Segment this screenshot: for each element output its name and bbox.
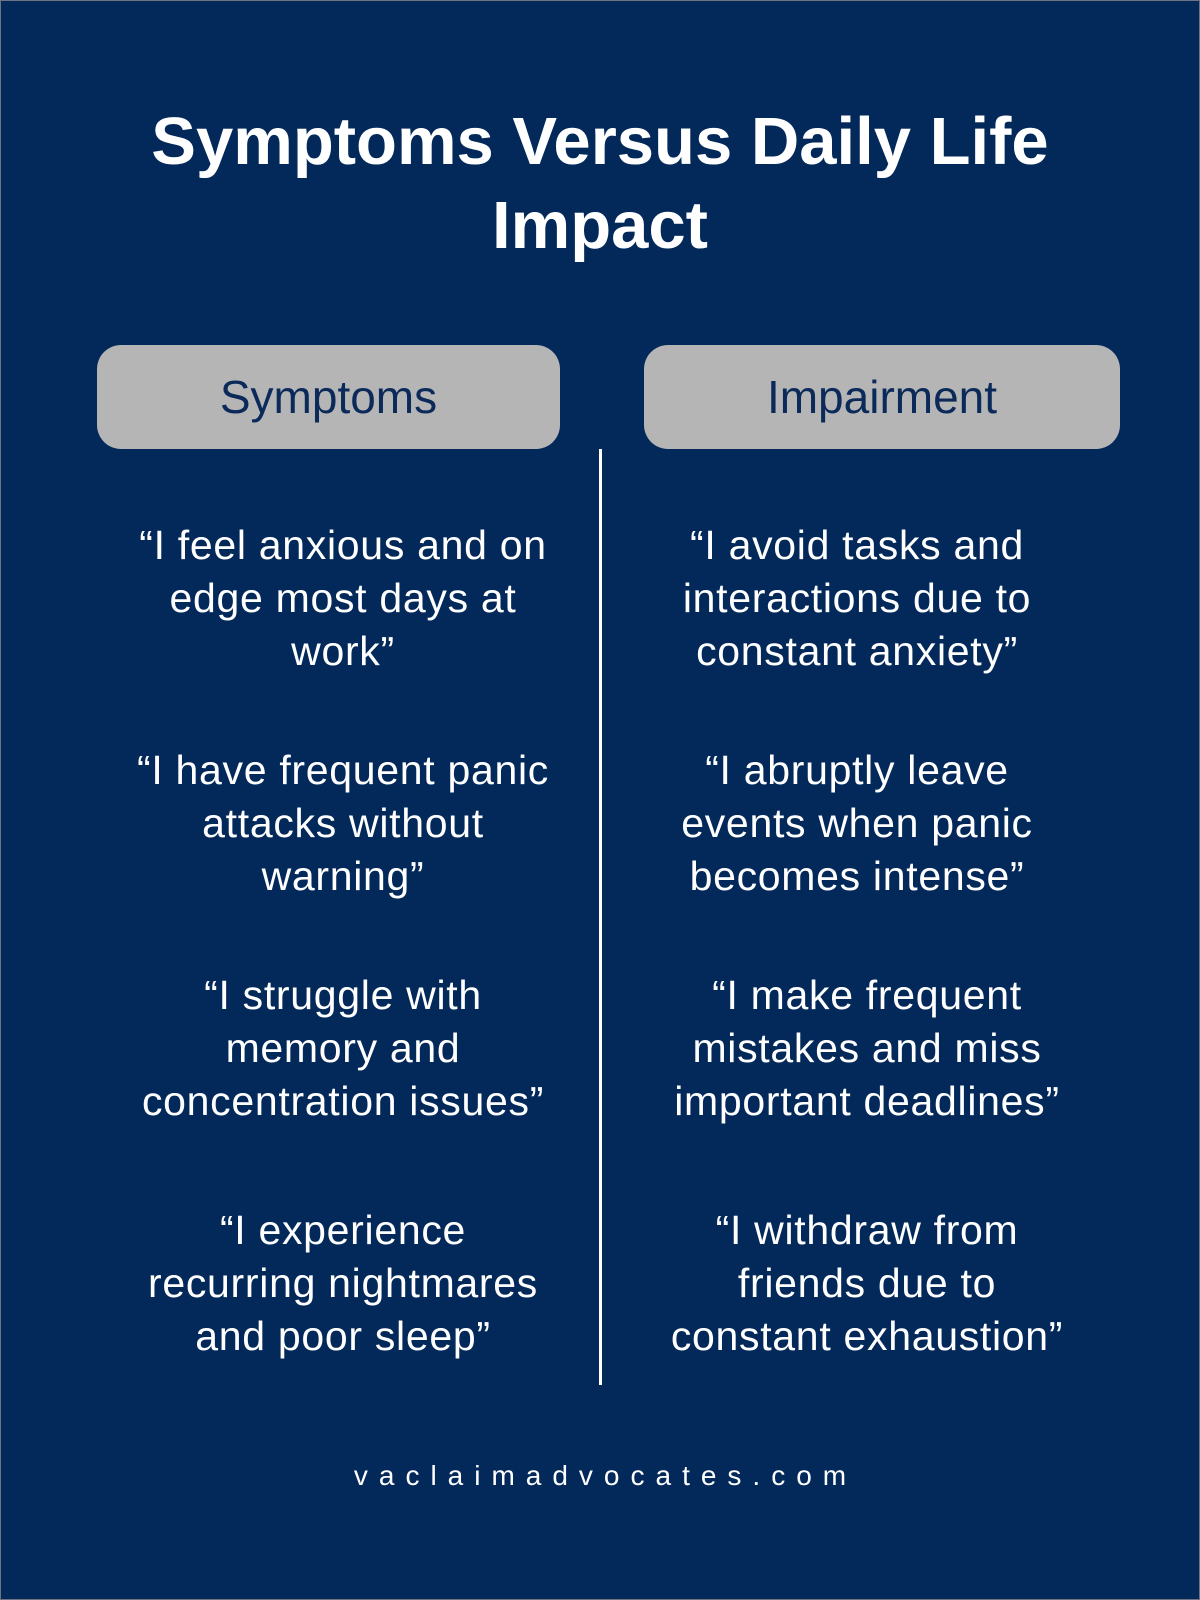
header: impairment xyxy=(644,345,1120,449)
impairment 1 xyxy=(683,522,1031,674)
impairment 3: important deadlines” xyxy=(674,1078,1060,1124)
symptom 4: “I experience xyxy=(220,1207,466,1253)
symptom 1: edge most days at xyxy=(170,575,516,621)
symptom 4: and poor sleep” xyxy=(195,1313,491,1359)
symptom 1 xyxy=(139,522,547,674)
impairment 1: constant anxiety” xyxy=(696,628,1018,674)
impairment 3: “I make frequent xyxy=(712,972,1022,1018)
impairment 1: interactions due to xyxy=(683,575,1031,621)
impairment 4: constant exhaustion” xyxy=(671,1313,1063,1359)
header: symptoms: Symptoms xyxy=(220,371,437,423)
title: Impact xyxy=(492,188,708,263)
center divider line xyxy=(599,449,602,1385)
impairment 4: friends due to xyxy=(738,1260,996,1306)
header: impairment: Impairment xyxy=(767,371,997,423)
symptom 2 xyxy=(137,747,549,899)
symptom 3: “I struggle with xyxy=(204,972,482,1018)
header: symptoms xyxy=(97,345,560,449)
symptom 3 xyxy=(142,972,544,1124)
impairment 2: becomes intense” xyxy=(690,853,1024,899)
symptom 4 xyxy=(148,1207,538,1359)
footer website: vaclaimadvocates.com xyxy=(354,1460,857,1491)
symptom 4: recurring nightmares xyxy=(148,1260,538,1306)
impairment 3 xyxy=(674,972,1060,1124)
impairment 2: events when panic xyxy=(681,800,1033,846)
symptom 1: work” xyxy=(291,628,395,674)
impairment 3: mistakes and miss xyxy=(692,1025,1042,1071)
symptom 1: “I feel anxious and on xyxy=(139,522,547,568)
title xyxy=(151,104,1049,263)
impairment 1: “I avoid tasks and xyxy=(690,522,1024,568)
impairment 4: “I withdraw from xyxy=(716,1207,1018,1253)
impairment 2: “I abruptly leave xyxy=(705,747,1009,793)
impairment 4 xyxy=(671,1207,1063,1359)
symptom 3: memory and xyxy=(226,1025,460,1071)
title: Symptoms Versus Daily Life xyxy=(151,104,1049,179)
symptom 3: concentration issues” xyxy=(142,1078,544,1124)
symptom 2: attacks without xyxy=(202,800,484,846)
symptom 2: “I have frequent panic xyxy=(137,747,549,793)
symptom 2: warning” xyxy=(262,853,424,899)
impairment 2 xyxy=(681,747,1033,899)
